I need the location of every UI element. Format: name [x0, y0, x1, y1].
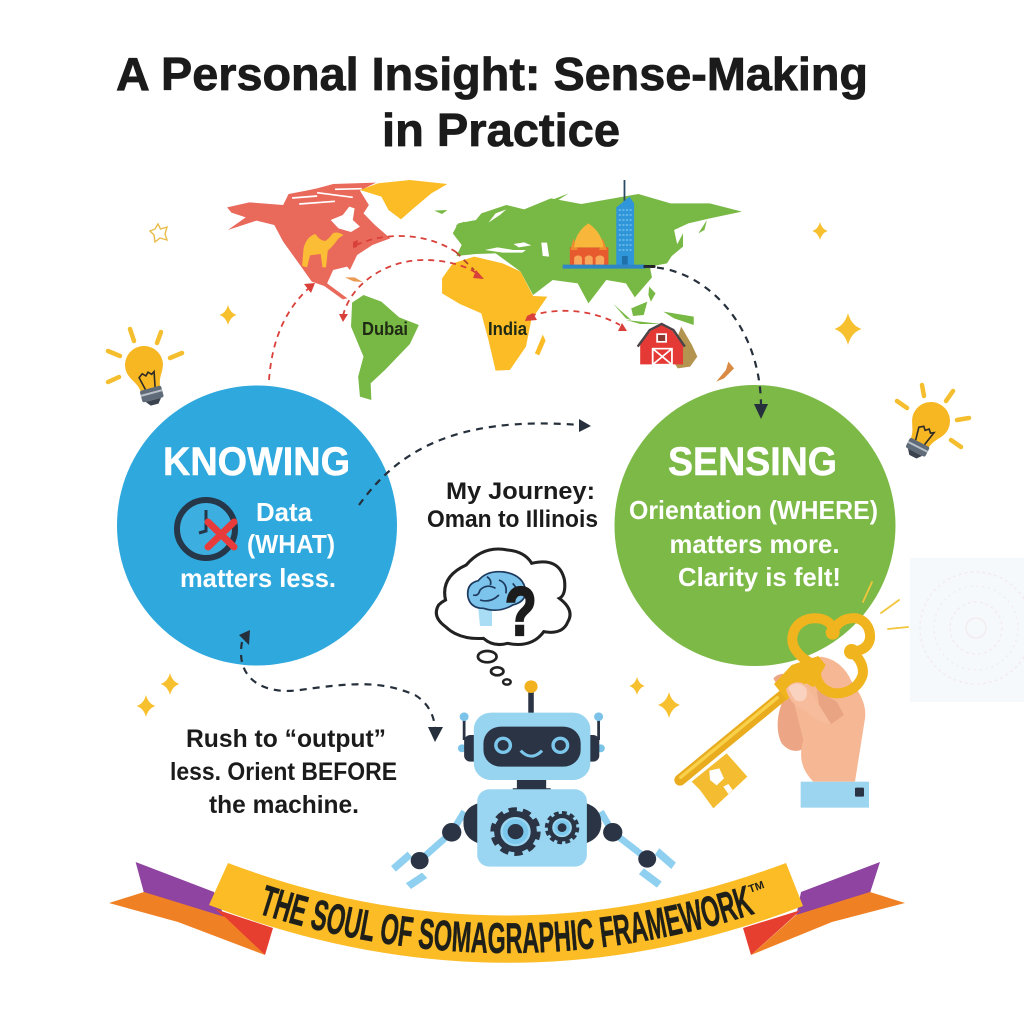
- map: Caribbean: [345, 277, 363, 282]
- map: Arctic channels: [292, 189, 362, 204]
- title: [116, 48, 868, 156]
- knowing heading: KNOWING: [163, 440, 350, 484]
- sensing text: Clarity is felt!: [678, 562, 841, 592]
- key bit: [692, 753, 747, 808]
- large gear: [493, 810, 538, 854]
- robot body with gears: [477, 789, 587, 867]
- rush text: [170, 725, 397, 819]
- rush text: the machine.: [209, 791, 359, 819]
- map: Hudson Bay: [331, 207, 360, 232]
- banner left tail: [109, 862, 273, 955]
- banner ribbon: [209, 863, 803, 963]
- banner: [109, 862, 905, 963]
- icon: outline star: [150, 224, 167, 242]
- route arrowheads: [304, 240, 627, 331]
- banner text: THE SOUL OF SOMAGRAPHIC FRAMEWORK: [262, 884, 756, 954]
- knowing text: (WHAT): [247, 529, 335, 559]
- icon: question mark: ?: [505, 573, 537, 650]
- sensing text: Orientation (WHERE): [629, 495, 878, 525]
- sensing heading: SENSING: [668, 440, 837, 484]
- banner right tail: [743, 862, 905, 955]
- icon: left light bulb: [108, 329, 182, 410]
- map label: Dubai: Dubai: [362, 318, 408, 339]
- rush text: Rush to “output”: [186, 725, 386, 753]
- icon: hand holding golden key: [680, 618, 870, 808]
- icon: temple and tower skyline: [563, 180, 656, 269]
- map: Greenland: [360, 180, 447, 219]
- map label: India: India: [488, 318, 528, 339]
- knowing text: Data: [256, 497, 313, 527]
- key collar: [774, 656, 826, 700]
- cuff: [801, 782, 869, 808]
- thought bubble with brain and question mark: [436, 549, 570, 685]
- key glints: [863, 582, 908, 629]
- red dashed travel routes: [269, 236, 620, 380]
- journey text: My Journey:: [446, 478, 595, 505]
- journey text: Oman to Illinois: [427, 506, 598, 533]
- map: Eurasia: [453, 194, 742, 303]
- map: New Zealand: [716, 362, 734, 382]
- faint rosette panel: [910, 558, 1024, 702]
- map: Madagascar: [535, 335, 546, 355]
- knowing text: [180, 497, 336, 593]
- panel: sensing: [614, 385, 896, 666]
- thumb: [786, 682, 832, 725]
- map: northern and eastern islands: [434, 193, 707, 325]
- map: Australia: [671, 327, 697, 368]
- arrow: knowing to journey: [359, 419, 591, 505]
- key shaft: [680, 695, 783, 780]
- icon: robot: [391, 680, 676, 889]
- key bow: [792, 618, 870, 693]
- world map: [227, 180, 742, 400]
- map: Africa: [442, 257, 547, 371]
- journey text: [427, 478, 598, 533]
- arrow: map to sensing: [644, 267, 768, 419]
- robot arms: [391, 803, 676, 889]
- robot neck: [513, 780, 551, 795]
- map: inner seas: [485, 209, 549, 257]
- trademark mark: TM: [747, 879, 766, 896]
- hand: [773, 657, 865, 782]
- sensing text: [629, 495, 878, 592]
- panel: knowing: [117, 386, 397, 666]
- map: South America: [351, 295, 419, 400]
- robot ears: [458, 735, 605, 762]
- arrow: robot to knowing: [239, 630, 443, 742]
- icon: right light bulb: [896, 385, 969, 465]
- robot head: [474, 713, 590, 780]
- small gear: [547, 813, 578, 843]
- icon: brain: [468, 572, 526, 626]
- sensing text: matters more.: [670, 529, 840, 559]
- title: in Practice: [382, 104, 620, 156]
- icon: crossed clock: [177, 500, 235, 558]
- robot antennas: [460, 680, 603, 740]
- sparkles: [137, 222, 862, 718]
- title: A Personal Insight: Sense-Making: [116, 48, 868, 100]
- map: North America: [227, 183, 390, 299]
- knowing text: matters less.: [180, 563, 336, 593]
- icon: barn: [638, 324, 685, 365]
- rush text: less. Orient BEFORE: [170, 758, 397, 786]
- icon: camel: [302, 233, 344, 267]
